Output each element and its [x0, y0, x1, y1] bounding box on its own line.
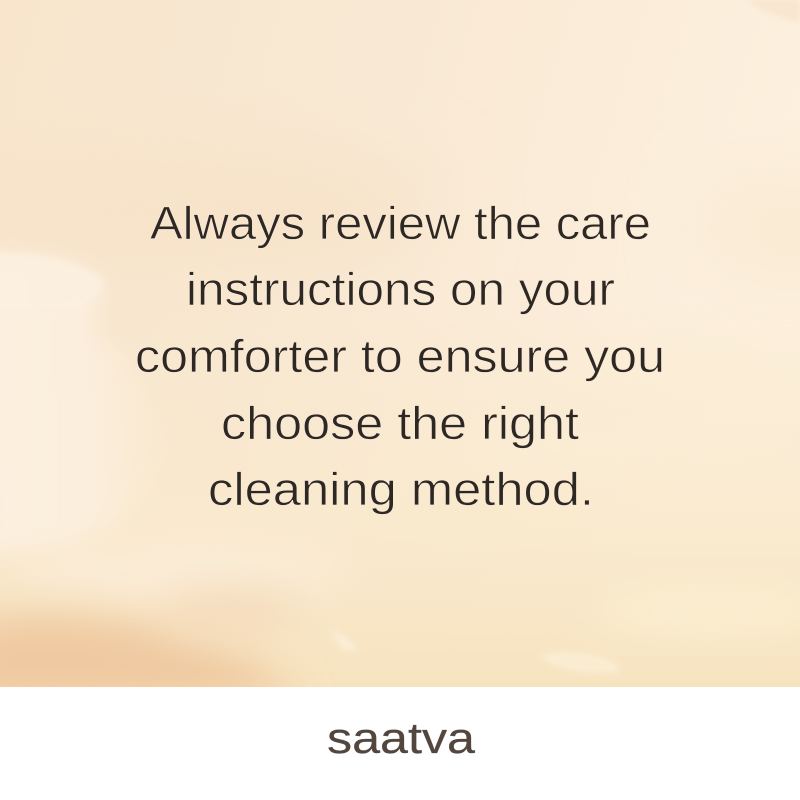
main message text: cleaning method. — [208, 463, 594, 515]
main message text: choose the right — [221, 397, 579, 449]
logo: saatva wordmark: saatva — [327, 714, 476, 763]
footer panel — [0, 687, 800, 800]
main message text: Always review the care — [150, 197, 651, 249]
main message text: comforter to ensure you — [135, 330, 665, 382]
main message text — [135, 197, 665, 515]
main message text: instructions on your — [186, 263, 615, 315]
